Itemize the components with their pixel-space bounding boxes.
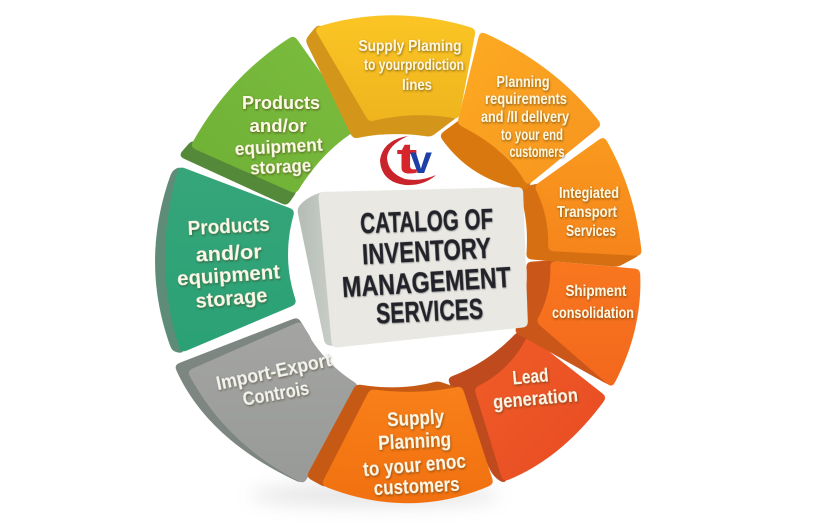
segment: planning requirements and delivery (light orange): [439, 31, 602, 190]
segment: products and/or equipment storage (green): [178, 35, 360, 206]
segment: products and/or equipment storage (green): equipment: [234, 135, 323, 159]
segment: supply planning to your end customers (orange): [306, 381, 494, 503]
segment: lead generation (red-orange): [447, 331, 607, 484]
segment: import-export controls (grey): Import-Export: [214, 350, 334, 395]
segment: planning requirements and delivery (light orange): and /II dellvery: [481, 109, 569, 126]
logo: tv: [380, 134, 436, 185]
segment: supply planning to your production lines (yellow): Supply Plaming: [358, 38, 462, 55]
segment: supply planning to your end customers (orange): Supply: [387, 406, 445, 431]
title: INVENTORY: [361, 233, 492, 271]
segment: planning requirements and delivery (light orange): customers: [510, 144, 565, 161]
segment: products and/or equipment storage (teal): Products: [187, 214, 270, 240]
segment: products and/or equipment storage (teal): equipment: [176, 261, 281, 291]
segment: integrated transport services (orange): Transport: [557, 204, 618, 221]
segment: supply planning to your end customers (orange): to your enoc: [362, 451, 467, 481]
segment: integrated transport services (orange): [518, 136, 642, 267]
segment: shipment consolidation (orange): [514, 260, 640, 388]
segment: integrated transport services (orange): Integiated: [559, 185, 619, 202]
ground shadow: [250, 484, 500, 506]
segment: products and/or equipment storage (green): Products: [242, 93, 320, 113]
segment: products and/or equipment storage (teal): storage: [195, 285, 268, 313]
centre card: [297, 187, 528, 348]
segment: lead generation (red-orange): Lead: [512, 365, 549, 390]
segment: products and/or equipment storage (green): storage: [250, 155, 312, 179]
segment: supply planning to your production lines (yellow): Iines: [402, 77, 432, 94]
segment: planning requirements and delivery (light orange): requirements: [485, 91, 567, 108]
segment: shipment consolidation (orange): Shipment: [566, 283, 627, 300]
segment: import-export controls (grey): [174, 317, 359, 484]
segment: integrated transport services (orange): Services: [566, 223, 616, 240]
segment: supply planning to your end customers (orange): Planning: [378, 429, 452, 455]
logo: tv: v: [410, 139, 432, 182]
title: [341, 204, 512, 331]
segment: lead generation (red-orange): generation: [492, 385, 579, 414]
title: SERVICES: [375, 294, 484, 331]
segment: planning requirements and delivery (light orange): Planning: [496, 74, 550, 91]
segment: planning requirements and delivery (light orange): to your end: [501, 127, 563, 144]
title: CATALOG OF: [360, 204, 494, 240]
segment: supply planning to your production lines (yellow): [305, 15, 476, 139]
segment: products and/or equipment storage (green): and/or: [250, 116, 306, 136]
title: MANAGEMENT: [341, 262, 512, 304]
segment: products and/or equipment storage (teal): [155, 165, 297, 354]
segment: shipment consolidation (orange): consolidation: [552, 305, 634, 322]
segment: import-export controls (grey): Controis: [241, 378, 311, 411]
segment: products and/or equipment storage (teal): and/or: [195, 241, 262, 267]
logo: tv: t: [396, 134, 418, 183]
segment: supply planning to your end customers (orange): customers: [373, 474, 460, 500]
segment: supply planning to your production lines (yellow): to yourprodiction: [364, 57, 464, 74]
